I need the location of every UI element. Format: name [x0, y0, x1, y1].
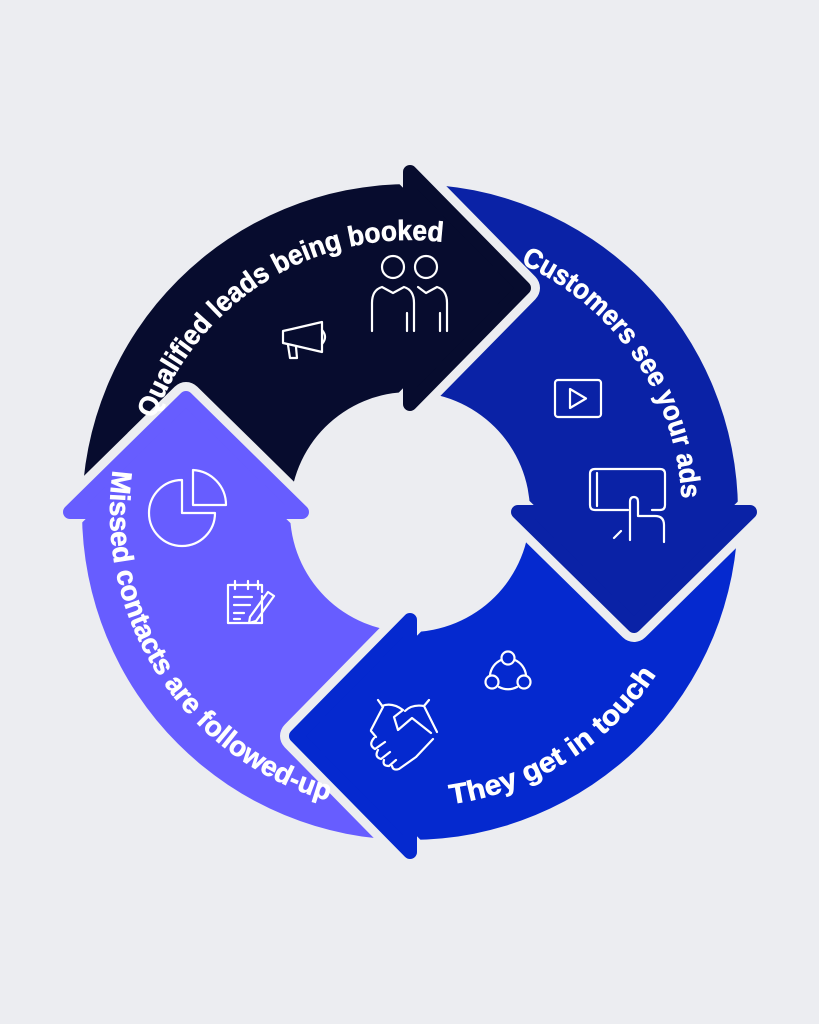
arrowhead: customers: [518, 512, 750, 626]
icon: network: [486, 652, 530, 689]
label: customers: Customers see your ads: [524, 248, 701, 498]
arrowhead: touch: [296, 620, 410, 852]
segment body: missed contacts: [82, 512, 410, 840]
arrowhead: qualified leads: [410, 172, 524, 404]
icon: people: [372, 256, 447, 331]
label: touch: They get in touch: [448, 668, 656, 804]
icon: pie chart: [149, 470, 226, 546]
segment body: customers see ads: [410, 184, 738, 512]
icon: handshake: [371, 700, 437, 770]
label: missed: Missed contacts are followed-up: [109, 472, 330, 804]
segment body: they get in touch: [410, 512, 738, 840]
label: qualified leads: Qualified leads being booked: [138, 219, 444, 416]
ring segments: [70, 172, 750, 852]
segment body: qualified leads: [82, 184, 410, 512]
icon: megaphone: [283, 322, 325, 358]
icon: tablet touch: [590, 469, 665, 542]
icon: play: [555, 380, 601, 417]
icons: [149, 256, 665, 770]
arrowhead: missed: [70, 398, 302, 512]
icon: notepad: [228, 581, 274, 623]
